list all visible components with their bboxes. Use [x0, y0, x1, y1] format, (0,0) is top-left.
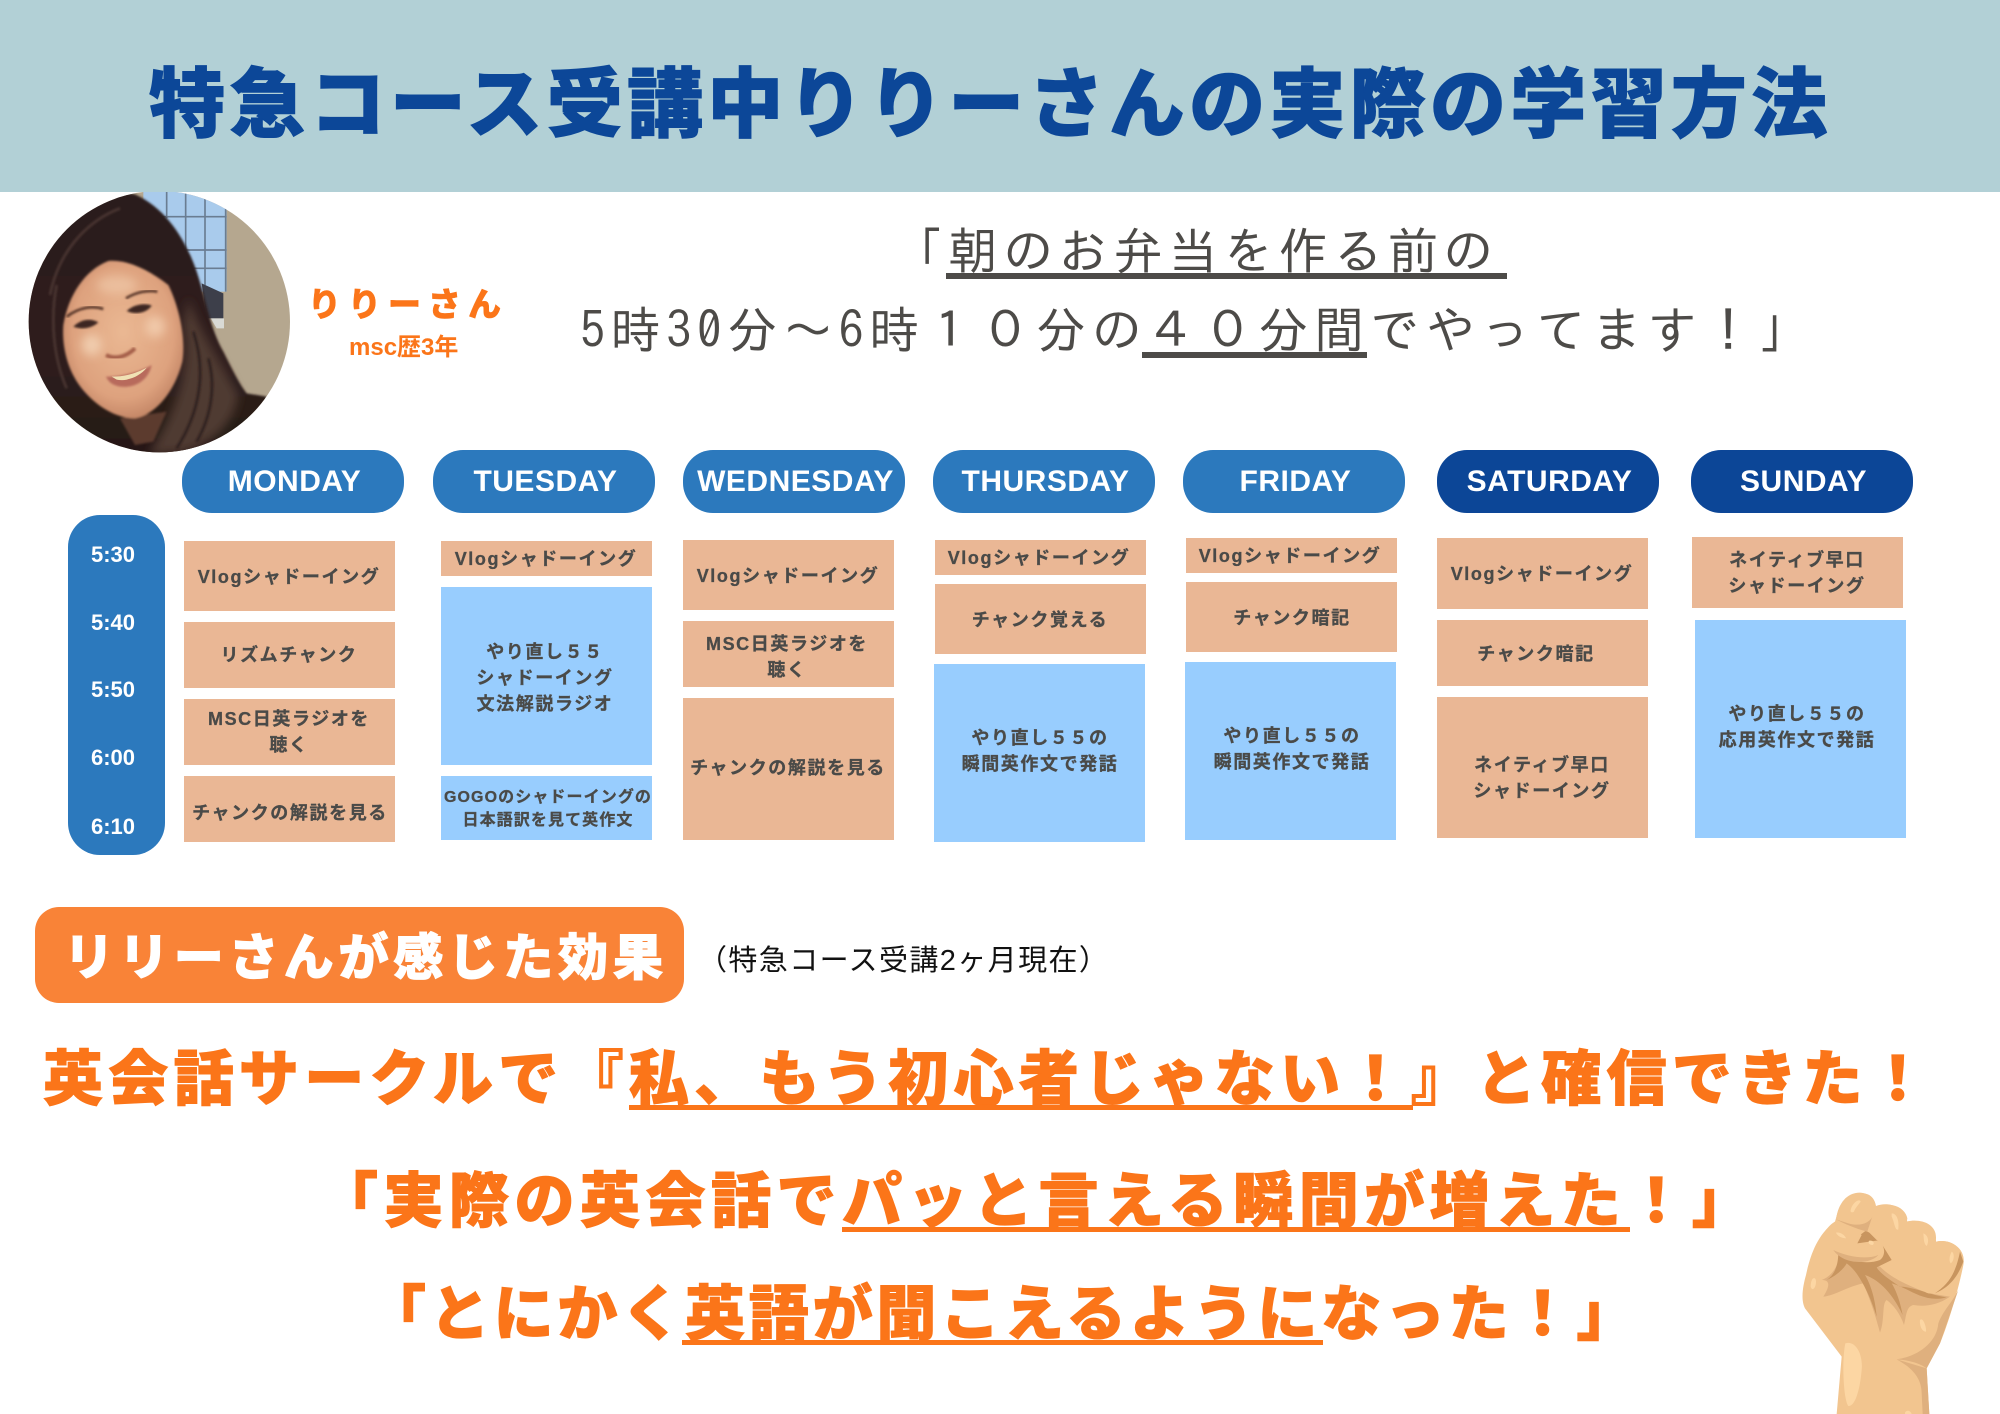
monday blocks — [184, 541, 395, 611]
sun block 1 — [1692, 537, 1903, 608]
time 5:40: 5:40 — [91, 610, 135, 635]
tue block 2 — [441, 587, 652, 765]
wed text 2: 聴く — [767, 660, 807, 680]
tue text 2 — [476, 642, 614, 714]
day: thursday: THURSDAY — [962, 465, 1129, 498]
fri text 2: チャンク暗記 — [1233, 608, 1351, 628]
time 6:10: 6:10 — [91, 814, 135, 839]
wed text 3: チャンクの解説を見る — [690, 758, 886, 778]
tue text 2: 文法解説ラジオ — [477, 694, 613, 714]
tue text 2: やり直し５５ — [486, 642, 604, 662]
fri text 3: やり直し５５の — [1223, 726, 1361, 746]
day: saturday — [1437, 450, 1659, 513]
tue block 1 — [441, 541, 652, 576]
fri text 3: 瞬間英作文で発話 — [1214, 752, 1370, 772]
fri block 1 — [1186, 538, 1397, 573]
thu text 2: チャンク覚える — [972, 610, 1108, 630]
tue text 1: Vlogシャドーイング — [455, 549, 637, 569]
fri text 1: Vlogシャドーイング — [1199, 546, 1381, 566]
thu text 3 — [962, 728, 1118, 774]
thu block 1 — [935, 540, 1146, 575]
day: friday — [1183, 450, 1405, 513]
day: thursday — [933, 450, 1155, 513]
thu block 3 — [934, 664, 1145, 842]
underline 2 — [842, 1227, 1630, 1232]
day: saturday: SATURDAY — [1467, 465, 1632, 498]
mon text 2: リズムチャンク — [220, 645, 358, 665]
sat block 3 — [1437, 697, 1648, 838]
day: wednesday — [683, 450, 905, 513]
day: sunday — [1691, 450, 1913, 513]
day: tuesday — [433, 450, 655, 513]
tue text 3 — [444, 788, 652, 828]
sat text 3: シャドーイング — [1473, 781, 1611, 801]
sat text 3 — [1473, 754, 1611, 801]
day: friday: FRIDAY — [1240, 465, 1351, 498]
tue text 2: シャドーイング — [476, 668, 614, 688]
effect line 2: 「実際の英会話でパッと言える瞬間が増えた！」 — [318, 1168, 1757, 1235]
effects badge — [35, 907, 684, 1003]
thu text 1: Vlogシャドーイング — [948, 548, 1130, 568]
day: monday: MONDAY — [228, 465, 361, 498]
day: tuesday: TUESDAY — [473, 465, 618, 498]
sat text 2: チャンク暗記 — [1477, 644, 1595, 664]
day: wednesday: WEDNESDAY — [697, 465, 894, 498]
effect line 1: 英会話サークルで『私、もう初心者じゃない！』と確信できた！ — [43, 1046, 1933, 1113]
time column — [68, 515, 165, 855]
header band — [0, 0, 2000, 192]
sun text 1 — [1728, 550, 1866, 596]
fri block 3 — [1185, 662, 1396, 840]
wed text 2: MSC日英ラジオを — [706, 634, 868, 654]
sat text 1: Vlogシャドーイング — [1451, 564, 1633, 584]
tue text 3: GOGOのシャドーイングの — [444, 789, 652, 806]
wed block 1 — [683, 540, 894, 610]
mon text 1: Vlogシャドーイング — [198, 567, 380, 587]
mon text 3: 聴く — [269, 735, 309, 755]
mon text 3 — [208, 709, 370, 755]
mon text 3: MSC日英ラジオを — [208, 709, 370, 729]
sun text 1: シャドーイング — [1728, 576, 1866, 596]
quote underline 1 — [946, 273, 1507, 279]
effects note: （特急コース受講2ヶ月現在） — [698, 945, 1109, 977]
sat text 3: ネイティブ早口 — [1474, 755, 1610, 775]
wed block 2 — [683, 621, 894, 687]
icon: raised fist — [1802, 1192, 1964, 1414]
time 6:00: 6:00 — [91, 745, 135, 770]
name: りりーさん — [308, 286, 508, 323]
sun block 2 — [1695, 620, 1906, 838]
sat block 1 — [1437, 538, 1648, 609]
sun text 2: やり直し５５の — [1728, 704, 1866, 724]
mon block 3 — [184, 699, 395, 765]
sat block 2 — [1437, 620, 1648, 686]
sun text 1: ネイティブ早口 — [1729, 550, 1865, 570]
quote line 1: 「朝のお弁当を作る前の — [893, 226, 1498, 276]
sun text 2: 応用英作文で発話 — [1719, 730, 1875, 750]
quote underline 2 — [1142, 352, 1367, 358]
day: monday — [182, 450, 404, 513]
time 5:50: 5:50 — [91, 677, 135, 702]
wed block 3 — [683, 698, 894, 840]
effect line 3: 「とにかく英語が聞こえるようになった！」 — [366, 1281, 1640, 1348]
wed text 1: Vlogシャドーイング — [697, 566, 879, 586]
fri block 2 — [1186, 582, 1397, 652]
mon block 2 — [184, 622, 395, 688]
mon text 4: チャンクの解説を見る — [192, 803, 388, 823]
effects badge text: リリーさんが感じた効果 — [64, 930, 668, 986]
experience: msc歴3年 — [349, 334, 458, 361]
thu text 3: やり直し５５の — [971, 728, 1109, 748]
tue block 3 — [441, 776, 652, 840]
fri text 3 — [1214, 726, 1370, 772]
underline 3 — [682, 1340, 1323, 1345]
thu block 2 — [935, 584, 1146, 654]
underline 1 — [629, 1105, 1413, 1110]
tue text 3: 日本語訳を見て英作文 — [462, 812, 634, 828]
title: 特急コース受講中りりーさんの実際の学習方法 — [149, 63, 1832, 148]
quote line 2: 5時30分～6時１０分の４０分間でやってます！」 — [580, 305, 1814, 355]
sun text 2 — [1718, 704, 1875, 750]
time 5:30: 5:30 — [91, 542, 135, 567]
mon block 4 — [184, 776, 395, 842]
portrait photo — [28, 192, 290, 452]
thu text 3: 瞬間英作文で発話 — [962, 754, 1118, 774]
day: sunday: SUNDAY — [1740, 465, 1867, 498]
wed text 2 — [706, 634, 868, 680]
